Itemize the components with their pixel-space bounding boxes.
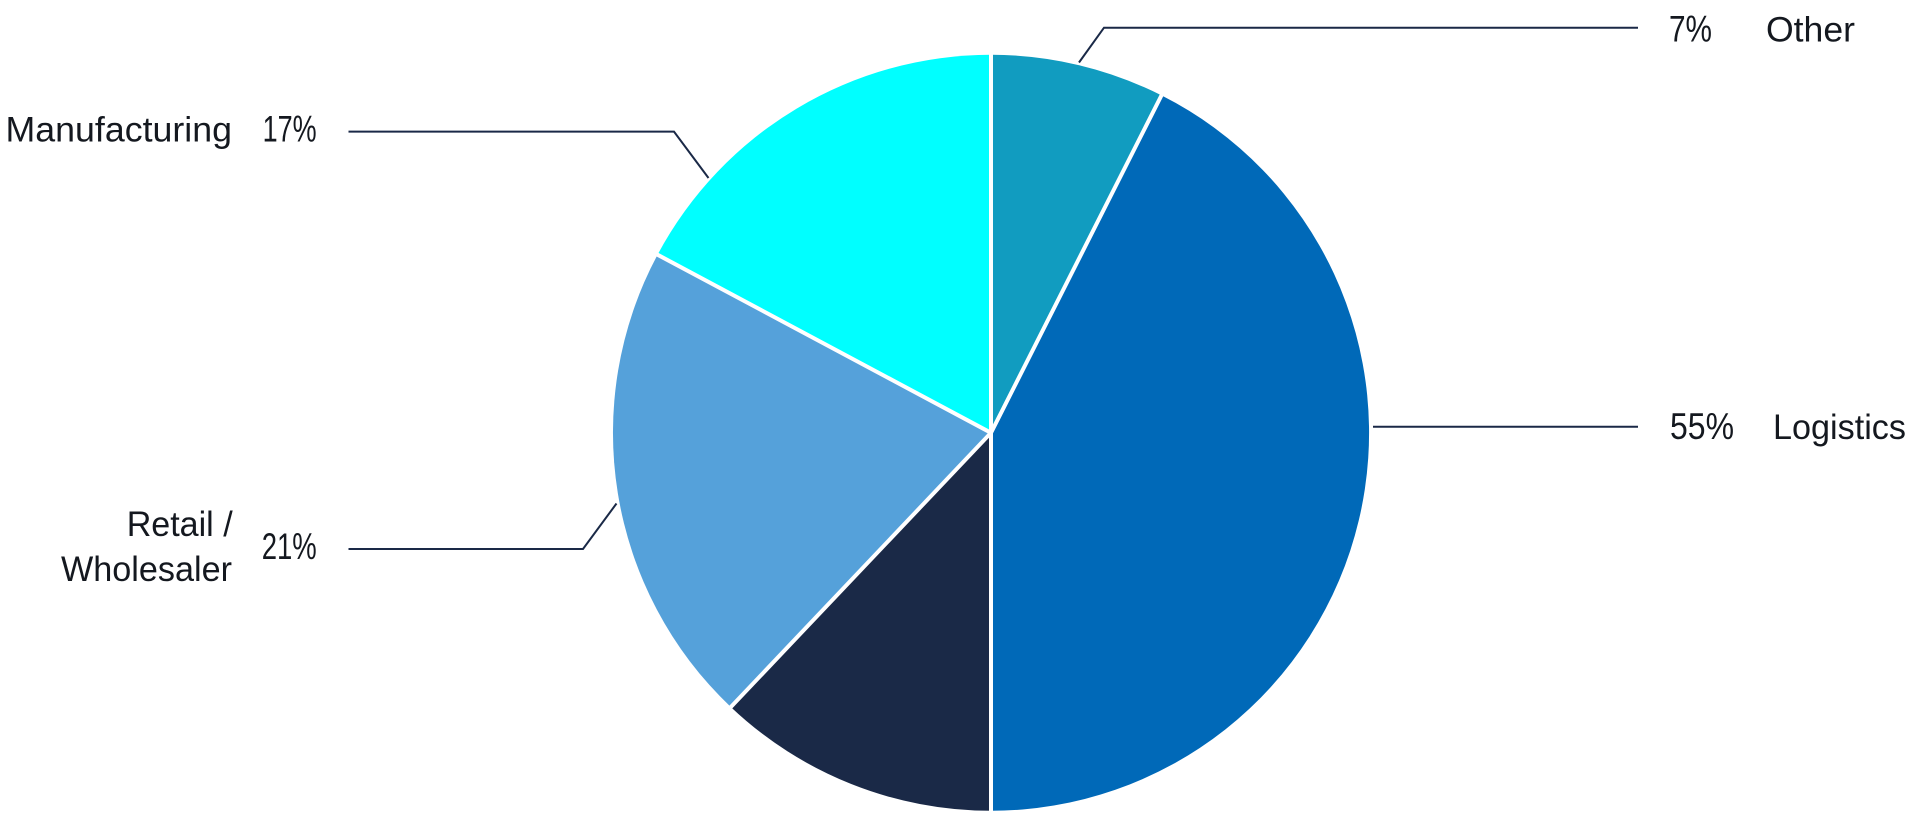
leader line: Manufacturing — [348, 132, 708, 178]
slice: Retail / Wholesaler 21% — [613, 255, 991, 707]
label: Manufacturing — [6, 108, 317, 149]
value: 7%: 7% — [1669, 9, 1712, 50]
leader line: Retail / Wholesaler — [348, 504, 616, 549]
name: Retail /: Retail / — [127, 504, 233, 544]
slice separators — [654, 50, 1163, 815]
name: Other: Other — [1766, 10, 1855, 50]
value: 21%: 21% — [262, 526, 317, 567]
name: Wholesaler: Wholesaler — [61, 549, 232, 589]
name: Logistics: Logistics — [1773, 407, 1906, 447]
value: 55%: 55% — [1670, 406, 1734, 447]
label: Retail / Wholesaler — [61, 504, 317, 589]
leader line: Other — [1079, 28, 1638, 62]
slice: Logistics 55% — [991, 95, 1369, 811]
slice: Manufacturing 17% — [658, 55, 991, 433]
slice: unlabelled dark segment — [731, 433, 991, 811]
label: Other — [1669, 9, 1855, 50]
slice: Other 7% — [991, 55, 1162, 433]
label: Logistics — [1670, 406, 1906, 447]
leader line: Logistics — [1373, 426, 1638, 428]
name: Manufacturing: Manufacturing — [6, 109, 232, 149]
pie chart — [613, 50, 1369, 815]
value: 17%: 17% — [263, 108, 317, 149]
